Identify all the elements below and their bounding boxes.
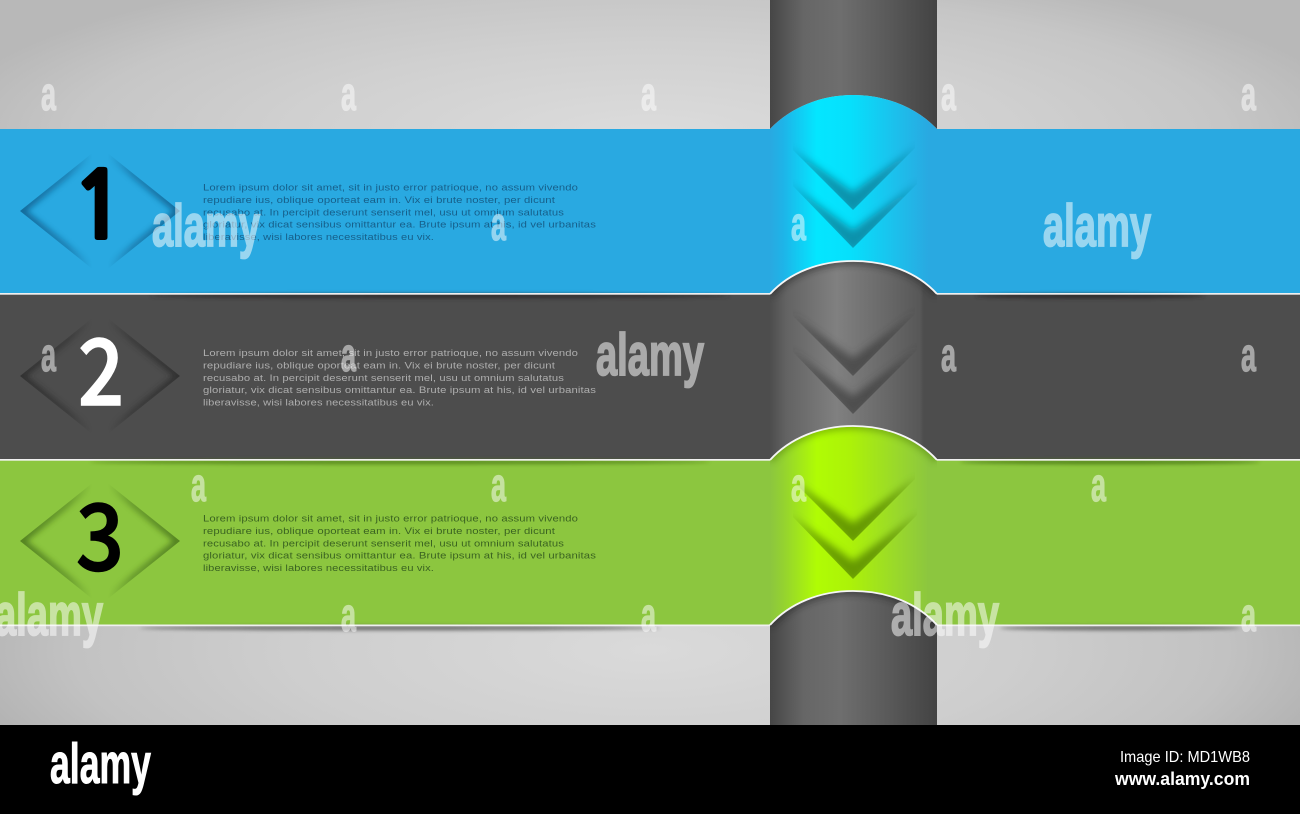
text block 1: recusabo at. In percipit deserunt senserit mel, usu ut omnium salutatus <box>203 208 564 218</box>
watermarks: large <box>0 193 1151 648</box>
band 3: green <box>0 460 1300 625</box>
background top <box>0 0 1300 130</box>
watermarks: small: a <box>941 67 956 120</box>
watermarks: small: a <box>341 328 356 381</box>
vertical column: dark segment <box>770 261 937 460</box>
text block 3: gloriatur, vix dicat sensibus omittantur ea. Brute ipsum at his, id vel urbanitas <box>203 550 596 562</box>
text block 2 <box>203 348 596 408</box>
diamond 2 <box>20 330 180 422</box>
diamond 3 <box>20 488 180 594</box>
vertical column: bottom segment <box>770 591 937 725</box>
watermarks: small: a <box>191 458 206 511</box>
footer url: www.alamy.com <box>1114 769 1250 789</box>
vertical column: blue segment <box>770 95 937 294</box>
text block 2: repudiare ius, oblique oporteat eam in. Vix ei brute noster, per dicunt <box>203 360 555 372</box>
diamond 1 <box>20 158 180 264</box>
watermarks: small <box>41 67 1256 641</box>
text block 2: liberavisse, wisi labores necessitatibus eu vix. <box>203 398 434 408</box>
white band separators <box>0 293 1300 626</box>
band 1: blue <box>0 129 1300 294</box>
text block 3 <box>203 514 596 574</box>
chevrons: green <box>794 480 914 579</box>
watermarks: large: alamy <box>596 322 704 388</box>
watermarks: small: a <box>941 328 956 381</box>
watermarks: large: alamy <box>152 193 260 259</box>
watermarks: small: a <box>1091 458 1106 511</box>
watermarks: small: a <box>41 67 56 120</box>
watermarks: small: a <box>1241 67 1256 120</box>
text block 1: gloriatur, vix dicat sensibus omittantur ea. Brute ipsum at his, id vel urbanitas <box>203 220 596 230</box>
number 3: 3 <box>76 464 124 597</box>
band shadows <box>90 294 1260 630</box>
watermarks: small: a <box>1241 328 1256 381</box>
band 2: dark grey <box>0 294 1300 460</box>
footer image id: Image ID: MD1WB8 <box>1120 749 1250 766</box>
footer bar <box>0 725 1300 814</box>
text block 1 <box>203 182 596 243</box>
text block 3: Lorem ipsum dolor sit amet, sit in justo error patrioque, no assum vivendo <box>203 514 578 524</box>
white arcs on the column <box>770 261 937 625</box>
watermarks: small: a <box>1241 588 1256 641</box>
chevrons: grey <box>798 320 908 414</box>
number 1: 1 <box>71 161 127 252</box>
watermarks: small: a <box>641 67 656 120</box>
text block 3: liberavisse, wisi labores necessitatibus eu vix. <box>203 563 434 574</box>
watermarks: small: a <box>341 67 356 120</box>
watermarks: small: a <box>341 588 356 641</box>
text block 1: repudiare ius, oblique oporteat eam in. Vix ei brute noster, per dicunt <box>203 195 555 206</box>
text block 2: recusabo at. In percipit deserunt senserit mel, usu ut omnium salutatus <box>203 373 564 384</box>
text block 1: Lorem ipsum dolor sit amet, sit in justo error patrioque, no assum vivendo <box>203 182 578 194</box>
text block 3: repudiare ius, oblique oporteat eam in. Vix ei brute noster, per dicunt <box>203 526 555 537</box>
watermarks: small: a <box>491 197 506 250</box>
text block 2: Lorem ipsum dolor sit amet, sit in justo error patrioque, no assum vivendo <box>203 348 578 359</box>
watermarks: small: a <box>791 197 806 250</box>
footer logo: alamy <box>50 732 151 796</box>
watermarks: large: alamy <box>0 582 103 648</box>
text block 3: recusabo at. In percipit deserunt senserit mel, usu ut omnium salutatus <box>203 538 564 550</box>
chevrons: blue <box>794 149 914 248</box>
watermarks: small: a <box>791 458 806 511</box>
watermarks: small: a <box>491 458 506 511</box>
number 2: 2 <box>78 299 124 432</box>
text block 1: liberavisse, wisi labores necessitatibus eu vix. <box>203 232 434 243</box>
background bottom <box>0 625 1300 725</box>
watermarks: small: a <box>41 328 56 381</box>
vertical column: green segment <box>770 426 937 625</box>
shadows under the arcs <box>770 261 937 625</box>
watermarks: large: alamy <box>891 582 999 648</box>
watermarks: small: a <box>641 588 656 641</box>
text block 2: gloriatur, vix dicat sensibus omittantur ea. Brute ipsum at his, id vel urbanitas <box>203 385 596 396</box>
vertical column: top segment <box>770 0 937 129</box>
watermarks: large: alamy <box>1043 193 1151 259</box>
